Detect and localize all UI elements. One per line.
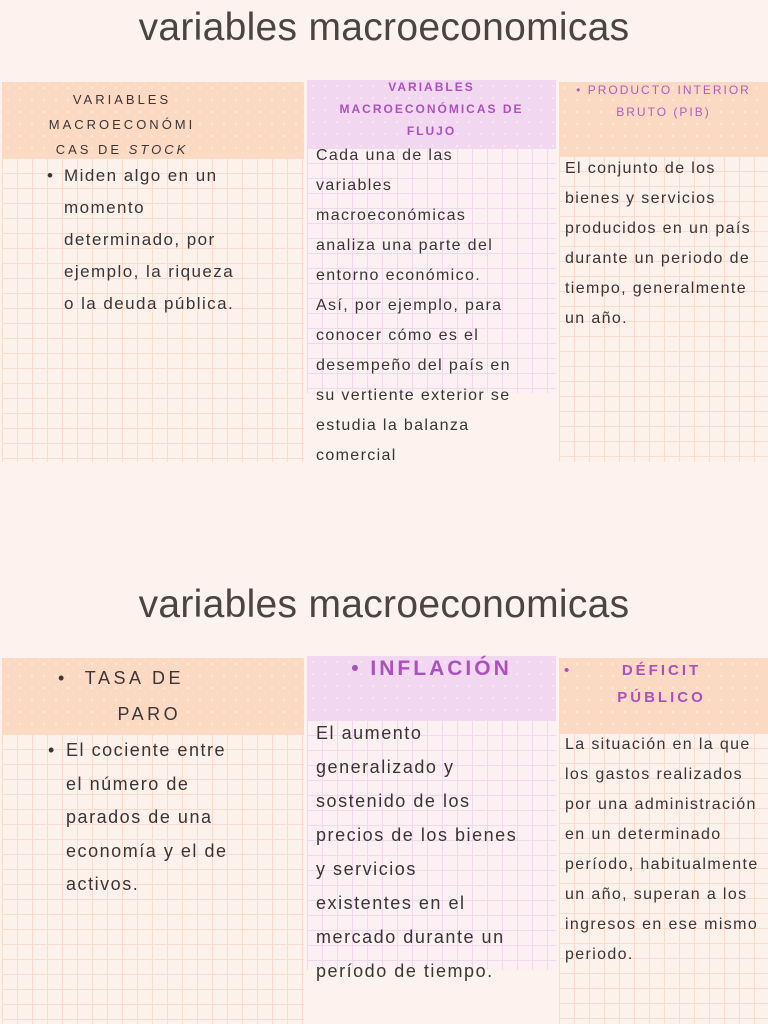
heading: paro: PARO	[118, 704, 181, 724]
text: deficit: La situación en la que	[565, 736, 751, 753]
text: pib: un año.	[565, 310, 628, 327]
panel: stock	[2, 82, 304, 462]
text: inflacion: sostenido de los	[316, 791, 471, 811]
heading: pib: • PRODUCTO INTERIOR	[576, 83, 751, 97]
heading: inflacion	[307, 656, 556, 720]
text: inflacion: precios de los bienes	[316, 825, 517, 845]
text: inflacion: El aumento	[316, 723, 422, 743]
text: deficit: por una administración	[565, 796, 757, 813]
text: stock	[64, 166, 234, 313]
text: flujo: analiza una parte del	[316, 237, 493, 254]
text: pib: producidos en un país	[565, 220, 751, 237]
heading: deficit	[559, 658, 768, 733]
heading: paro	[2, 658, 304, 734]
bullet: •	[47, 166, 53, 185]
panel: deficit	[559, 658, 768, 1024]
text: paro: economía y el de	[66, 840, 228, 860]
text: pib: durante un periodo de	[565, 250, 750, 267]
text: stock: momento	[64, 198, 145, 217]
text: pib: tiempo, generalmente	[565, 280, 747, 297]
text: deficit: en un determinado	[565, 826, 722, 843]
heading: pib	[559, 82, 768, 156]
text: inflacion	[316, 723, 517, 981]
text: deficit: ingresos en ese mismo	[565, 916, 758, 933]
heading: deficit: DÉFICIT	[622, 662, 701, 679]
panel: flujo	[307, 80, 556, 464]
text: deficit: un año, superan a los	[565, 886, 747, 903]
text: deficit: los gastos realizados	[565, 766, 743, 783]
text: pib	[565, 160, 751, 327]
heading: inflacion: • INFLACIÓN	[351, 657, 512, 680]
text: stock: o la deuda pública.	[64, 294, 234, 313]
text: flujo: entorno económico.	[316, 267, 481, 284]
text: paro	[66, 740, 228, 894]
text: paro: activos.	[66, 874, 139, 894]
heading: flujo: FLUJO	[407, 124, 456, 138]
text: paro: parados de una	[66, 807, 213, 827]
text: pib: El conjunto de los	[565, 160, 716, 177]
text: paro: el número de	[66, 774, 189, 794]
text: inflacion: mercado durante un	[316, 927, 505, 947]
heading: pib: BRUTO (PIB)	[616, 105, 711, 119]
text: flujo	[316, 147, 511, 464]
heading: flujo: MACROECONÓMICAS DE	[339, 102, 524, 116]
text: deficit	[565, 736, 759, 963]
text: flujo: comercial	[316, 447, 397, 464]
heading: deficit: •	[564, 662, 569, 679]
text: stock: ejemplo, la riqueza	[64, 262, 234, 281]
text: stock: Miden algo en un	[64, 166, 218, 185]
text: deficit: período, habitualmente	[565, 856, 759, 873]
heading: paro: • TASA DE	[58, 668, 184, 688]
heading: flujo: VARIABLES	[388, 80, 475, 94]
text: inflacion: generalizado y	[316, 757, 454, 777]
title: top: variables macroeconomicas	[139, 6, 629, 49]
heading: stock: VARIABLES	[73, 92, 171, 107]
heading: stock	[2, 82, 304, 158]
text: flujo: estudia la balanza	[316, 417, 469, 434]
heading: flujo	[307, 80, 556, 148]
panel: inflacion	[307, 656, 556, 981]
heading: stock: CAS DE STOCK	[56, 142, 188, 157]
text: flujo: macroeconómicas	[316, 207, 466, 224]
bullet: •	[48, 740, 54, 760]
panel: paro	[2, 658, 304, 1024]
text: inflacion: período de tiempo.	[316, 961, 494, 981]
heading: deficit: PÚBLICO	[617, 689, 706, 706]
heading: stock: MACROECONÓMI	[49, 117, 195, 132]
text: inflacion: y servicios	[316, 859, 417, 879]
text: flujo: Así, por ejemplo, para	[316, 297, 502, 314]
text: flujo: conocer cómo es el	[316, 327, 479, 344]
title: bottom: variables macroeconomicas	[139, 583, 629, 626]
text: inflacion: existentes en el	[316, 893, 466, 913]
text: flujo: Cada una de las	[316, 147, 453, 164]
text: paro: El cociente entre	[66, 740, 226, 760]
panel: pib	[559, 82, 768, 462]
text: flujo: su vertiente exterior se	[316, 387, 510, 404]
text: flujo: desempeño del país en	[316, 357, 511, 374]
text: deficit: periodo.	[565, 946, 634, 963]
text: pib: bienes y servicios	[565, 190, 716, 207]
text: flujo: variables	[316, 177, 392, 194]
text: stock: determinado, por	[64, 230, 216, 249]
